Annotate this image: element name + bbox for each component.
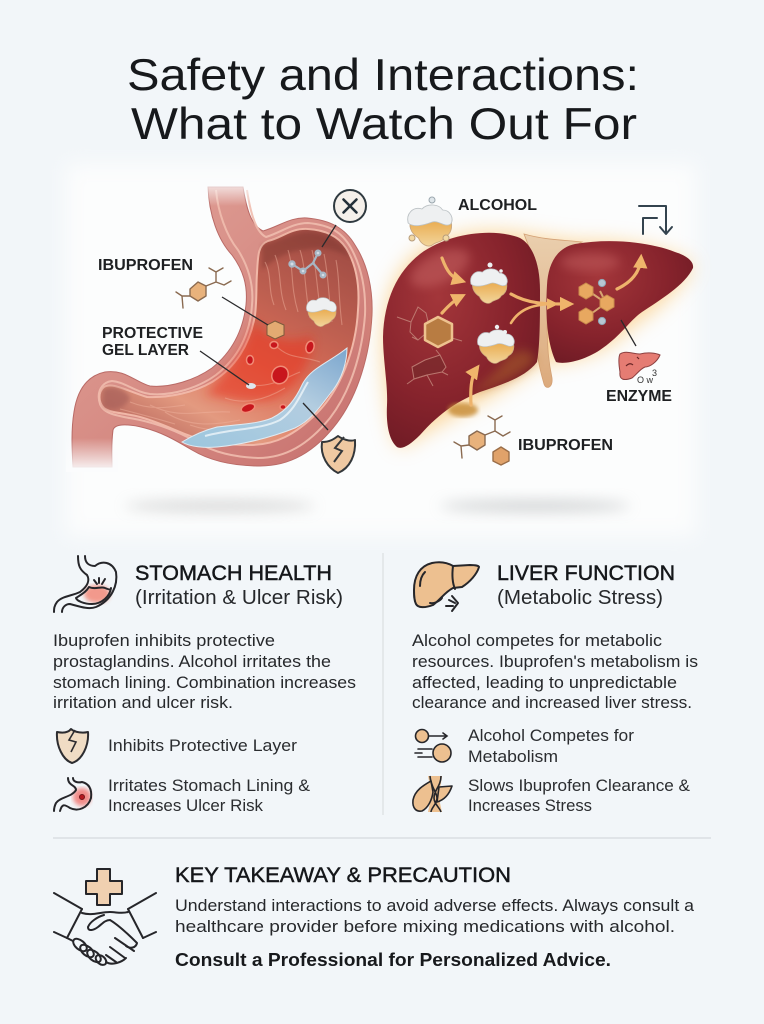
label: protective gel layer (102, 325, 203, 359)
liver lower edge shade (470, 351, 535, 395)
icon: liver (414, 562, 479, 611)
hexagon marker (267, 321, 284, 339)
esophagus fade (200, 178, 250, 206)
panel: stomach health (53, 556, 356, 815)
icon: stomach (54, 556, 116, 612)
stomach folds (120, 250, 342, 430)
stomach body (72, 187, 372, 467)
central hexagon molecule (425, 317, 452, 347)
icon: blocked x (334, 190, 366, 222)
icon: broken shield (322, 436, 355, 473)
ligament (524, 234, 582, 387)
body text: clearance and increased liver stress. (412, 693, 692, 712)
item text (108, 776, 311, 815)
liver ground shadow (440, 500, 630, 512)
subheading: (Irritation & Ulcer Risk) (135, 586, 343, 609)
panel: liver function (412, 562, 698, 815)
hepatic glow spot (448, 403, 478, 417)
faint ring molecules (397, 307, 462, 386)
stomach inner lining (100, 229, 358, 445)
title: Safety and Interactions: (127, 51, 639, 100)
body text: Understand interactions to avoid adverse effects. Always consult a (175, 896, 695, 915)
item text: Alcohol Competes for (468, 726, 634, 745)
illustration: stomach (66, 178, 372, 512)
image panel backdrop (66, 164, 696, 536)
icon: redirect arrow (639, 206, 672, 234)
stomach wall highlight band (99, 190, 365, 458)
column divider (382, 553, 384, 815)
label: ibuprofen (liver): IBUPROFEN (518, 437, 613, 454)
pointer: gel layer (200, 351, 249, 385)
icon: stomach ulcer (54, 778, 91, 811)
body text: irritation and ulcer risk. (53, 693, 233, 712)
ibuprofen molecule in stomach (289, 251, 325, 277)
panel: key takeaway (54, 864, 695, 970)
label: protective gel layer: GEL LAYER (102, 342, 189, 359)
molecule icon: ibuprofen (liver) (454, 416, 510, 465)
item text: Metabolism (468, 747, 558, 766)
stomach inflamed zone (205, 320, 313, 401)
liver glow (383, 232, 693, 448)
label: ibuprofen (stomach): IBUPROFEN (98, 257, 193, 274)
alcohol bubble upper (471, 262, 507, 303)
stomach ground shadow (125, 500, 315, 512)
ulcers (240, 340, 315, 414)
liver highlights (405, 241, 475, 295)
pointer: x icon (322, 225, 336, 247)
icon: sad liver: O w (637, 375, 654, 385)
pointer: ibuprofen to hexagon (222, 297, 268, 325)
body text: healthcare provider before mixing medications with alcohol. (175, 917, 675, 936)
alcohol bubble top-left (408, 197, 452, 246)
pointer: enzyme (621, 320, 636, 346)
item text (468, 726, 634, 766)
body text: resources. Ibuprofen's metabolism is (412, 652, 698, 671)
body text (53, 631, 356, 712)
pointer: broken shield (303, 403, 328, 430)
gel spot (246, 383, 256, 389)
heading: KEY TAKEAWAY & PRECAUTION (175, 864, 511, 887)
icon: handshake with medical cross (54, 869, 156, 967)
body text (175, 896, 695, 936)
liver left lobe (383, 233, 540, 448)
item text: Slows Ibuprofen Clearance & (468, 776, 691, 795)
body text: prostaglandins. Alcohol irritates the (53, 652, 331, 671)
item text: Increases Ulcer Risk (108, 796, 263, 815)
label: alcohol: ALCOHOL (458, 197, 537, 214)
subheading: (Metabolic Stress) (497, 586, 663, 609)
label: enzyme: ENZYME (606, 388, 672, 405)
body text: affected, leading to unpredictable (412, 673, 677, 692)
alcohol foam in stomach (306, 298, 336, 327)
protective gel layer (182, 348, 347, 447)
alcohol bubble lower (478, 325, 514, 363)
icon: competition (415, 730, 451, 762)
item text: Irritates Stomach Lining & (108, 776, 311, 795)
heading: STOMACH HEALTH (135, 562, 332, 585)
title: What to Watch Out For (131, 100, 637, 149)
icon: sad liver: 3 (652, 368, 657, 378)
fundus shading (262, 232, 350, 270)
enzyme molecule network (579, 279, 614, 325)
divider (53, 837, 711, 839)
illustration: liver (383, 197, 693, 512)
body text: Ibuprofen inhibits protective (53, 631, 275, 650)
liver right lobe (546, 241, 693, 363)
item text: Inhibits Protective Layer (108, 736, 297, 755)
duodenum opening (103, 387, 130, 409)
call to action: Consult a Professional for Personalized Advice. (175, 949, 611, 970)
item text: Increases Stress (468, 796, 592, 815)
icon: liver pair with bile duct (413, 776, 452, 812)
body text: stomach lining. Combination increases (53, 673, 356, 692)
icon: sad liver (619, 352, 660, 385)
item text (468, 776, 691, 815)
body text: Alcohol competes for metabolic (412, 631, 663, 650)
duodenum fade (66, 438, 118, 472)
label: protective gel layer: PROTECTIVE (102, 325, 203, 342)
icon: broken shield (57, 729, 88, 763)
body text (412, 631, 698, 712)
title (127, 51, 639, 149)
arrows (442, 258, 641, 405)
heading: LIVER FUNCTION (497, 562, 675, 585)
molecule icon: ibuprofen (stomach) (176, 268, 231, 308)
